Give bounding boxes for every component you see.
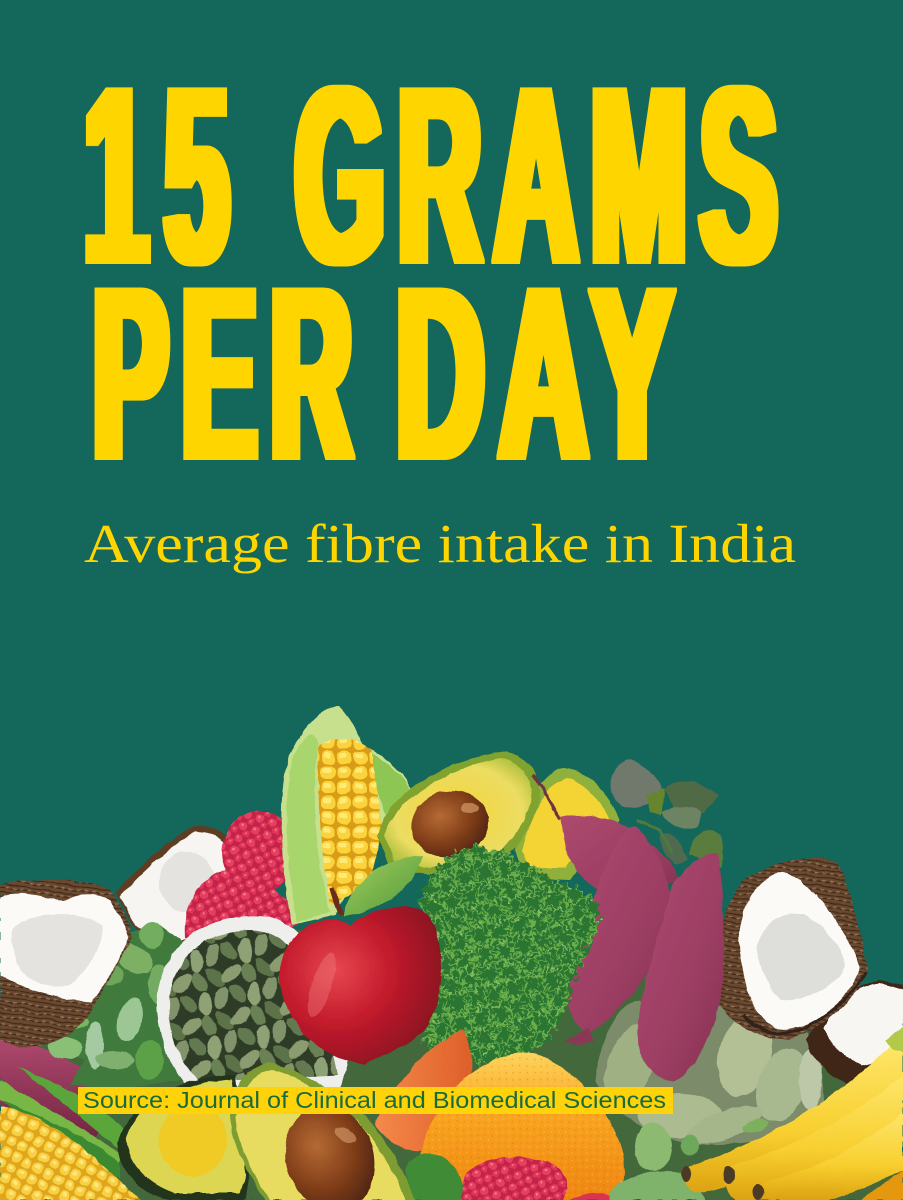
icon: carrot bbox=[375, 1030, 472, 1151]
title: 15 grams per day: GRAMS bbox=[295, 36, 777, 316]
icon: raspberry top bbox=[222, 811, 296, 893]
icon: sweet potatoes bbox=[532, 775, 724, 1081]
subtitle: Average fibre intake in India bbox=[84, 513, 796, 574]
source label: Source: Journal of Clinical and Biomedical Sciences bbox=[83, 1087, 666, 1113]
icon: orange bbox=[418, 1052, 625, 1200]
icon: corn bottom left bbox=[0, 1108, 140, 1200]
icon: leaves top right bbox=[610, 760, 723, 868]
panel: bowl of pumpkin seeds bbox=[157, 916, 347, 1090]
icon: purple root behind left bbox=[0, 1033, 112, 1145]
icon: raspberry lower bbox=[185, 871, 298, 948]
title: 15 grams per day: 15 bbox=[84, 36, 229, 316]
title: 15 grams per day: DAY bbox=[396, 238, 673, 511]
icon: right coconut bbox=[716, 858, 868, 1039]
icon: broccoli bbox=[405, 1154, 462, 1200]
illustration: food pile bbox=[0, 705, 903, 1200]
icon: left coconut bbox=[0, 880, 133, 1047]
icon: corn stalk leaves bottom left bbox=[0, 1066, 125, 1178]
icon: corn with husk bbox=[281, 705, 412, 925]
icon: bottom leaves bbox=[610, 1117, 769, 1200]
icon: carrot greens bbox=[421, 844, 600, 1065]
icon: herb leaves bbox=[47, 922, 186, 1090]
title: 15 grams per day: PER bbox=[93, 237, 352, 511]
icon: bananas bbox=[681, 1027, 903, 1200]
backdrop: shadow behind pile bbox=[0, 930, 903, 1200]
icon: front avocado half with pit bbox=[378, 752, 540, 875]
icon: bottom left avocado bbox=[118, 1075, 250, 1200]
icon: artichoke bbox=[594, 1000, 825, 1152]
icon: back avocado bbox=[515, 768, 620, 880]
title: 15 grams per day bbox=[84, 36, 777, 511]
icon: bottom centre avocado bbox=[230, 1063, 415, 1200]
icon: apple bbox=[279, 855, 441, 1065]
icon: small right coconut bbox=[805, 980, 903, 1085]
icon: raspberry bottom bbox=[460, 1157, 567, 1200]
icon: back coconut bbox=[116, 826, 230, 950]
